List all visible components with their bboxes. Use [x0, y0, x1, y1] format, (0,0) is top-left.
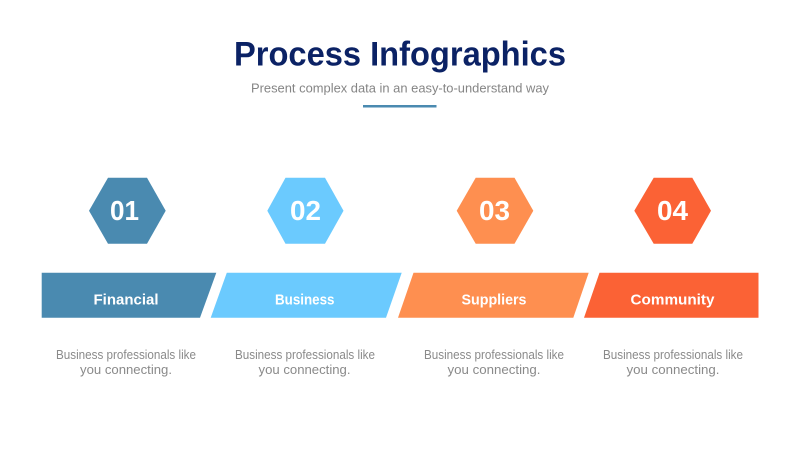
hexagon 04	[634, 178, 711, 244]
description 3: Business professionals like	[424, 348, 564, 362]
description 2: Business professionals like	[235, 348, 375, 362]
description 1: you connecting.	[80, 363, 172, 377]
description 3	[424, 348, 564, 377]
hexagon 02	[267, 178, 344, 244]
subtitle: Present complex data in an easy-to-understand way	[251, 80, 549, 96]
hexagon 01	[89, 178, 166, 244]
description 4	[603, 348, 743, 377]
step 1: financial	[42, 178, 216, 377]
hexagon 03	[457, 178, 533, 244]
hexagon 03: 03	[479, 195, 510, 226]
description 4: you connecting.	[626, 363, 720, 377]
bar: suppliers: Suppliers	[462, 291, 526, 308]
hexagon 02: 02	[290, 195, 321, 226]
title underline	[363, 105, 436, 108]
title: Process Infographics	[234, 36, 566, 74]
hexagon 01: 01	[110, 195, 139, 226]
bar: financial	[42, 273, 216, 318]
step 2: business	[211, 178, 402, 377]
bar: community	[584, 273, 758, 318]
description 2: you connecting.	[258, 363, 350, 377]
bar: community: Community	[630, 291, 715, 308]
step 4: community	[584, 178, 758, 377]
description 1	[56, 348, 196, 377]
bar: business: Business	[275, 291, 334, 308]
description 2	[235, 348, 375, 377]
step 3: suppliers	[398, 178, 589, 377]
hexagon 04: 04	[657, 195, 688, 226]
description 4: Business professionals like	[603, 348, 743, 362]
bar: suppliers	[398, 273, 589, 318]
bar: financial: Financial	[94, 291, 158, 308]
description 3: you connecting.	[448, 363, 540, 377]
description 1: Business professionals like	[56, 348, 196, 362]
bar: business	[211, 273, 402, 318]
